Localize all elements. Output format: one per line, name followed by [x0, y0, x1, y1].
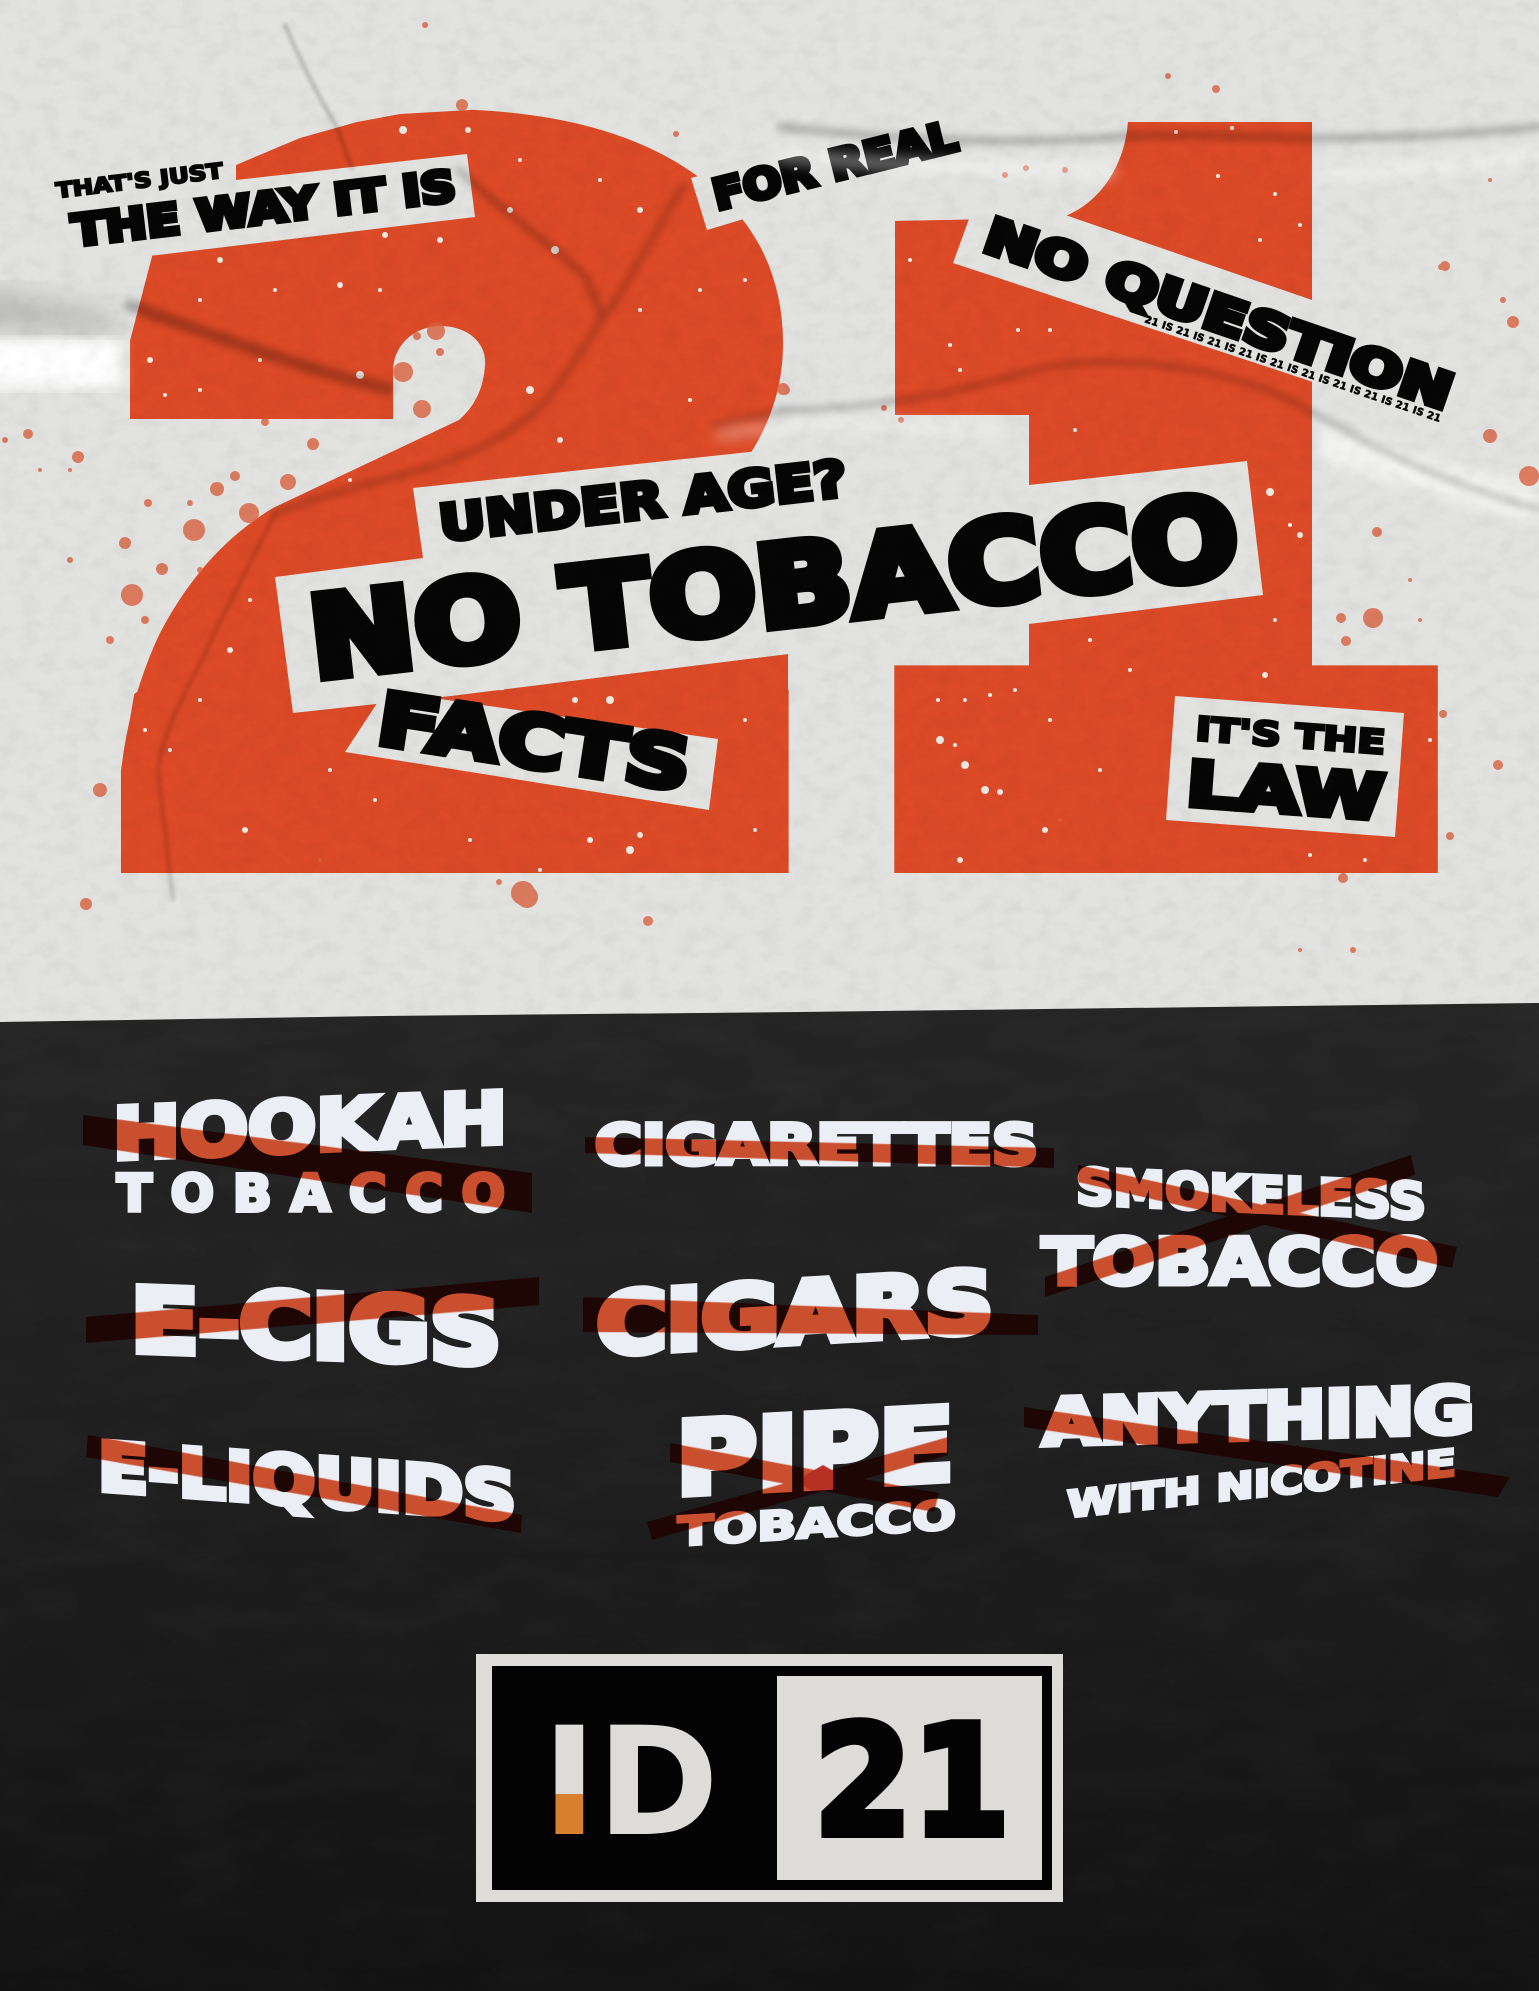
paper wrinkles and mottled texture [0, 0, 1539, 1040]
panel: white crumpled paper background [0, 0, 1539, 1040]
cigars: CIGARS [597, 1253, 993, 1374]
struck-out product list [98, 1077, 1474, 1556]
text: 21 is 21 repeated: 21 IS 21 IS 21 IS 21 IS 21 IS 21 IS 21 IS 21 IS 21 IS 21 [1143, 314, 1442, 425]
panel: black background [0, 1003, 1539, 1991]
pipe tobacco: TOBACCO [678, 1493, 956, 1556]
text: law: LAW [1184, 747, 1387, 834]
logo text: 21: 21 [814, 1693, 1010, 1870]
with nicotine: WITH NICOTINE [1067, 1441, 1456, 1527]
label: it's the law [1166, 696, 1404, 837]
label: for real [691, 105, 975, 230]
text: no question: NO QUESTION [977, 207, 1460, 421]
e-liquids: E-LIQUIDS [98, 1428, 516, 1536]
text: that's just: THAT'S JUST [55, 159, 225, 203]
anything: ANYTHING [1043, 1374, 1474, 1461]
hookah tobacco: TOBACCO [117, 1165, 505, 1224]
text: under age?: UNDER AGE? [436, 450, 850, 553]
cigarettes: CIGARETTES [595, 1113, 1038, 1177]
paper highlight and shadow at left edge [0, 285, 120, 388]
label: facts: FACTS [372, 677, 697, 807]
label: facts [345, 677, 718, 810]
strike-through bands [83, 1115, 1510, 1540]
big red number 21: 1 [834, 0, 1455, 1043]
smokeless tobacco: TOBACCO [1042, 1226, 1438, 1300]
text: the way it is: THE WAY IT IS [69, 162, 459, 257]
text: it's the: IT'S THE [1194, 709, 1387, 762]
logo text: ID with orange cigarette tip: ID [542, 1696, 719, 1870]
big red number 21 [60, 0, 1455, 1075]
white specks on the red number [143, 126, 1432, 872]
label: for real: FOR REAL [708, 112, 962, 220]
logo: ID 21 [476, 1654, 1063, 1902]
text: no tobacco: NO TOBACCO [303, 472, 1245, 705]
pipe: PIPE [676, 1386, 954, 1518]
hookah: HOOKAH [113, 1077, 507, 1176]
smokeless: SMOKELESS [1076, 1158, 1426, 1231]
e-cigs: E-CIGS [131, 1269, 501, 1385]
label: that's just the way it is [50, 150, 475, 265]
paint splatter on paper [2, 22, 1539, 953]
label: no question [953, 186, 1465, 425]
label: under age? no tobacco [275, 422, 1263, 713]
